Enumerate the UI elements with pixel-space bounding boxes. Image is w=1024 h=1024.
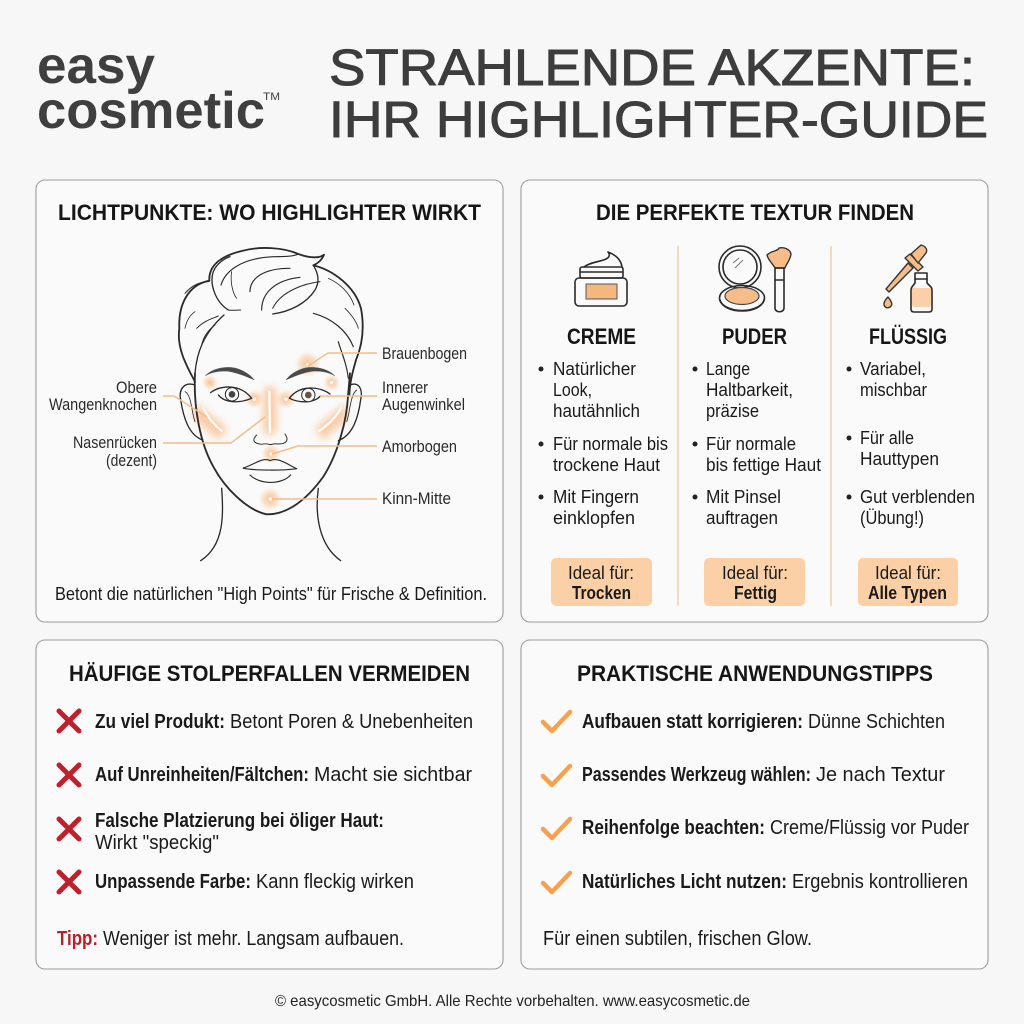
- caption: Betont die natürlichen "High Points" für Frische & Definition.: [55, 584, 487, 604]
- list: Puder: auftragen: [706, 507, 778, 528]
- nose: [254, 434, 287, 445]
- heading: Lichtpunkte: LICHTPUNKTE: WO HIGHLIGHTER WIRKT: [58, 200, 481, 225]
- item: Zu viel Produkt: [95, 711, 473, 733]
- heading: Puder: PUDER: [722, 324, 787, 349]
- item: Aufbauen: Aufbauen statt korrigieren:: [582, 711, 803, 733]
- icon: cream jar: [575, 252, 627, 306]
- face outline: [195, 373, 350, 514]
- panel: Anwendungstipps: [521, 640, 988, 969]
- list: Puder: Für normale: [706, 433, 796, 454]
- list: Puder: bis fettige Haut: [706, 454, 821, 475]
- labels: left: Wangenknochen: [49, 396, 157, 414]
- list: Creme: [538, 358, 668, 528]
- footer: © easycosmetic GmbH. Alle Rechte vorbehalten. www.easycosmetic.de: [275, 993, 750, 1010]
- item: Reihenfolge: [582, 817, 969, 839]
- item: Werkzeug: Je nach Textur: [816, 764, 945, 786]
- eyebrows: [205, 367, 335, 380]
- list: Puder: Haltbarkeit,: [706, 379, 793, 400]
- icons: orange checks: [543, 712, 570, 892]
- item: Unreinheiten: [95, 764, 472, 786]
- list: Flüssig: Gut verblenden: [860, 486, 975, 507]
- icon: compact and brush: [719, 246, 791, 312]
- labels: right: Augenwinkel: [382, 396, 465, 414]
- item: Zu viel Produkt: Betont Poren & Unebenheiten: [230, 711, 473, 733]
- item: Falsche Platzierung: [95, 810, 384, 854]
- heading: Flüssig: FLÜSSIG: [869, 324, 947, 349]
- heading: Creme: CREME: [567, 324, 636, 349]
- lips: [243, 460, 297, 482]
- title: STRAHLENDE AKZENTE:: [329, 39, 975, 96]
- heading: Anwendungstipps: PRAKTISCHE ANWENDUNGSTIPPS: [577, 661, 933, 686]
- list: Flüssig: mischbar: [860, 379, 927, 400]
- item: Falsche Platzierung: Falsche Platzierung bei öliger Haut:: [95, 810, 384, 832]
- badge: Trocken: Trocken: [572, 582, 631, 603]
- logo: easy cosmetic: easy: [37, 37, 155, 95]
- list: Flüssig: (Übung!): [860, 507, 924, 528]
- labels: left: Obere: [116, 379, 157, 397]
- list: Puder: [692, 358, 821, 528]
- title: IHR HIGHLIGHTER-GUIDE: [329, 91, 988, 148]
- list: Creme: einklopfen: [553, 507, 635, 528]
- panel: Textur: [521, 180, 988, 622]
- labels: right: Innerer: [382, 379, 428, 397]
- badge: Alle Typen: [858, 558, 958, 606]
- closing note: Für einen subtilen, frischen Glow.: [543, 928, 812, 950]
- list: Flüssig: [846, 358, 975, 528]
- badge: Trocken: [551, 558, 652, 606]
- item: Reihenfolge: Creme/Flüssig vor Puder: [770, 817, 969, 839]
- badge: Fettig: Fettig: [734, 582, 777, 603]
- list: Puder: Mit Pinsel: [706, 486, 781, 507]
- badge: Alle Typen: Alle Typen: [868, 582, 947, 603]
- labels: right: [382, 345, 467, 508]
- logo: easy cosmetic: [37, 37, 280, 140]
- labels: left: (dezent): [106, 452, 157, 470]
- item: Falsche Platzierung: Wirkt "speckig": [95, 832, 219, 854]
- list: Creme: Natürlicher: [553, 358, 636, 379]
- face diagram: [179, 248, 363, 561]
- list: Flüssig: Für alle: [860, 427, 914, 448]
- heading: Textur: DIE PERFEKTE TEXTUR FINDEN: [596, 200, 914, 225]
- item: Unpassende Farbe: [95, 871, 414, 893]
- list: Flüssig: Hauttypen: [860, 448, 939, 469]
- hair: [179, 248, 363, 395]
- item: Licht: [582, 871, 968, 893]
- title: [329, 39, 988, 148]
- neck: [201, 488, 341, 561]
- badge: Fettig: Ideal für:: [722, 562, 788, 583]
- logo: easy cosmetic: TM: [263, 91, 280, 103]
- icon: dropper and bottle: [884, 245, 932, 312]
- item: Licht: Natürliches Licht nutzen:: [582, 871, 787, 893]
- list: Creme: Look,: [553, 379, 592, 400]
- labels: right: Kinn-Mitte: [382, 490, 451, 508]
- item: Unreinheiten: Macht sie sichtbar: [314, 764, 472, 786]
- tip: Weniger ist mehr. Langsam aufbauen.: [103, 928, 404, 950]
- list: Creme: Mit Fingern: [553, 486, 639, 507]
- item: Reihenfolge: Reihenfolge beachten:: [582, 817, 765, 839]
- item: Aufbauen: Dünne Schichten: [808, 711, 945, 733]
- heading: Stolperfallen: HÄUFIGE STOLPERFALLEN VERMEIDEN: [69, 661, 470, 686]
- list: Creme: Für normale bis: [553, 433, 668, 454]
- item: Unpassende Farbe: Unpassende Farbe:: [95, 871, 251, 893]
- item: Unpassende Farbe: Kann fleckig wirken: [256, 871, 414, 893]
- logo: easy cosmetic: cosmetic: [37, 82, 265, 140]
- labels: right: Amorbogen: [382, 438, 457, 456]
- panel: Stolperfallen: [36, 640, 503, 969]
- list: Puder: Lange: [706, 358, 750, 379]
- badge: Fettig: [704, 558, 805, 606]
- tip: Tipp:: [57, 928, 98, 950]
- leader lines: [163, 353, 377, 499]
- eyes: [211, 387, 330, 402]
- list: Creme: trockene Haut: [553, 454, 660, 475]
- highlight glows: [193, 351, 347, 511]
- panel: Lichtpunkte: [36, 180, 503, 622]
- icons: red crosses: [59, 711, 79, 892]
- ears: [180, 384, 361, 441]
- item: Unreinheiten: Auf Unreinheiten/Fältchen:: [95, 764, 309, 786]
- item: Licht: Ergebnis kontrollieren: [792, 871, 968, 893]
- list: Creme: hautähnlich: [553, 400, 640, 421]
- list: Puder: präzise: [706, 400, 759, 421]
- labels: left: Nasenrücken: [73, 434, 157, 452]
- labels: left: [49, 379, 157, 470]
- labels: right: Brauenbogen: [382, 345, 467, 363]
- item: Werkzeug: Passendes Werkzeug wählen:: [582, 764, 811, 786]
- badge: Trocken: Ideal für:: [568, 562, 634, 583]
- badge: Alle Typen: Ideal für:: [875, 562, 941, 583]
- list: Flüssig: Variabel,: [860, 358, 926, 379]
- item: Zu viel Produkt: Zu viel Produkt:: [95, 711, 225, 733]
